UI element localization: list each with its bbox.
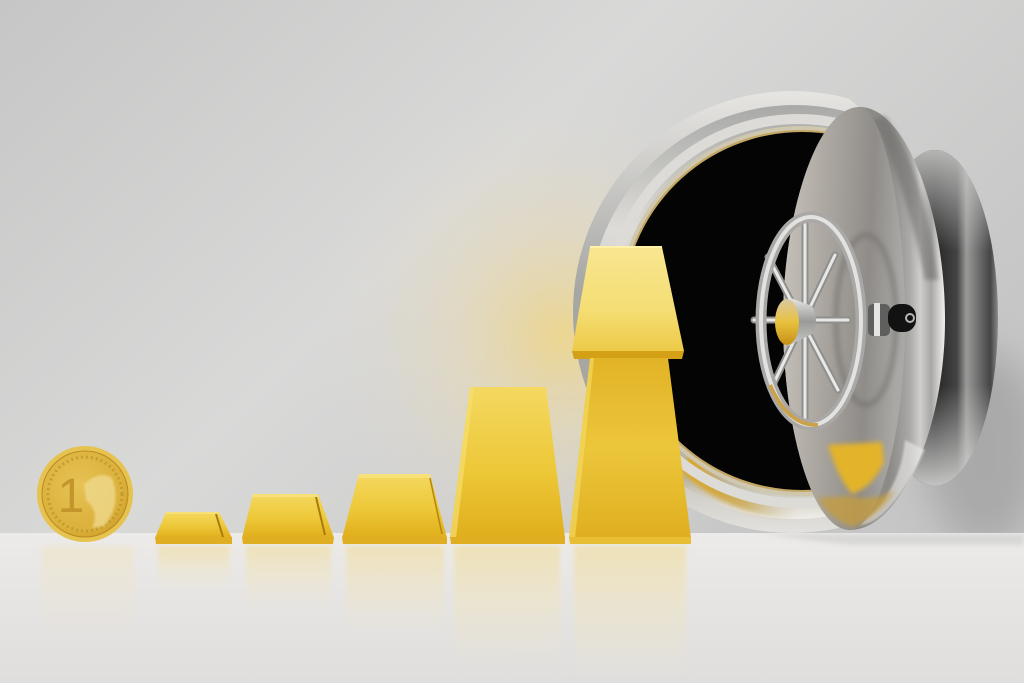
door face [783,107,905,530]
wheel hub [788,297,816,346]
vault gold lip [628,126,828,496]
door band highlight streaks [872,116,938,280]
vault gold reflection [682,456,792,519]
gold bar 1 [155,512,232,544]
gold bar 3 [342,474,447,544]
vault dark opening [635,132,824,490]
door outer band [783,107,945,530]
door latch [868,303,916,336]
gold coin [37,446,133,542]
door gold reflection [828,442,884,494]
vault door [783,107,998,530]
wheel rim [761,217,861,425]
door recess shadow [836,235,896,405]
coin numeral: 1 [58,470,84,523]
handwheel [754,217,861,425]
gold bar 2 [242,494,334,544]
gold bar 4 [450,387,565,544]
gold bar stack: top bar [572,247,684,359]
door rear dark section [872,150,998,486]
vault frame [573,91,858,533]
background: reflective floor [0,533,1024,683]
wheel spokes [754,222,848,420]
gold bar stack: lower bar [569,358,691,544]
